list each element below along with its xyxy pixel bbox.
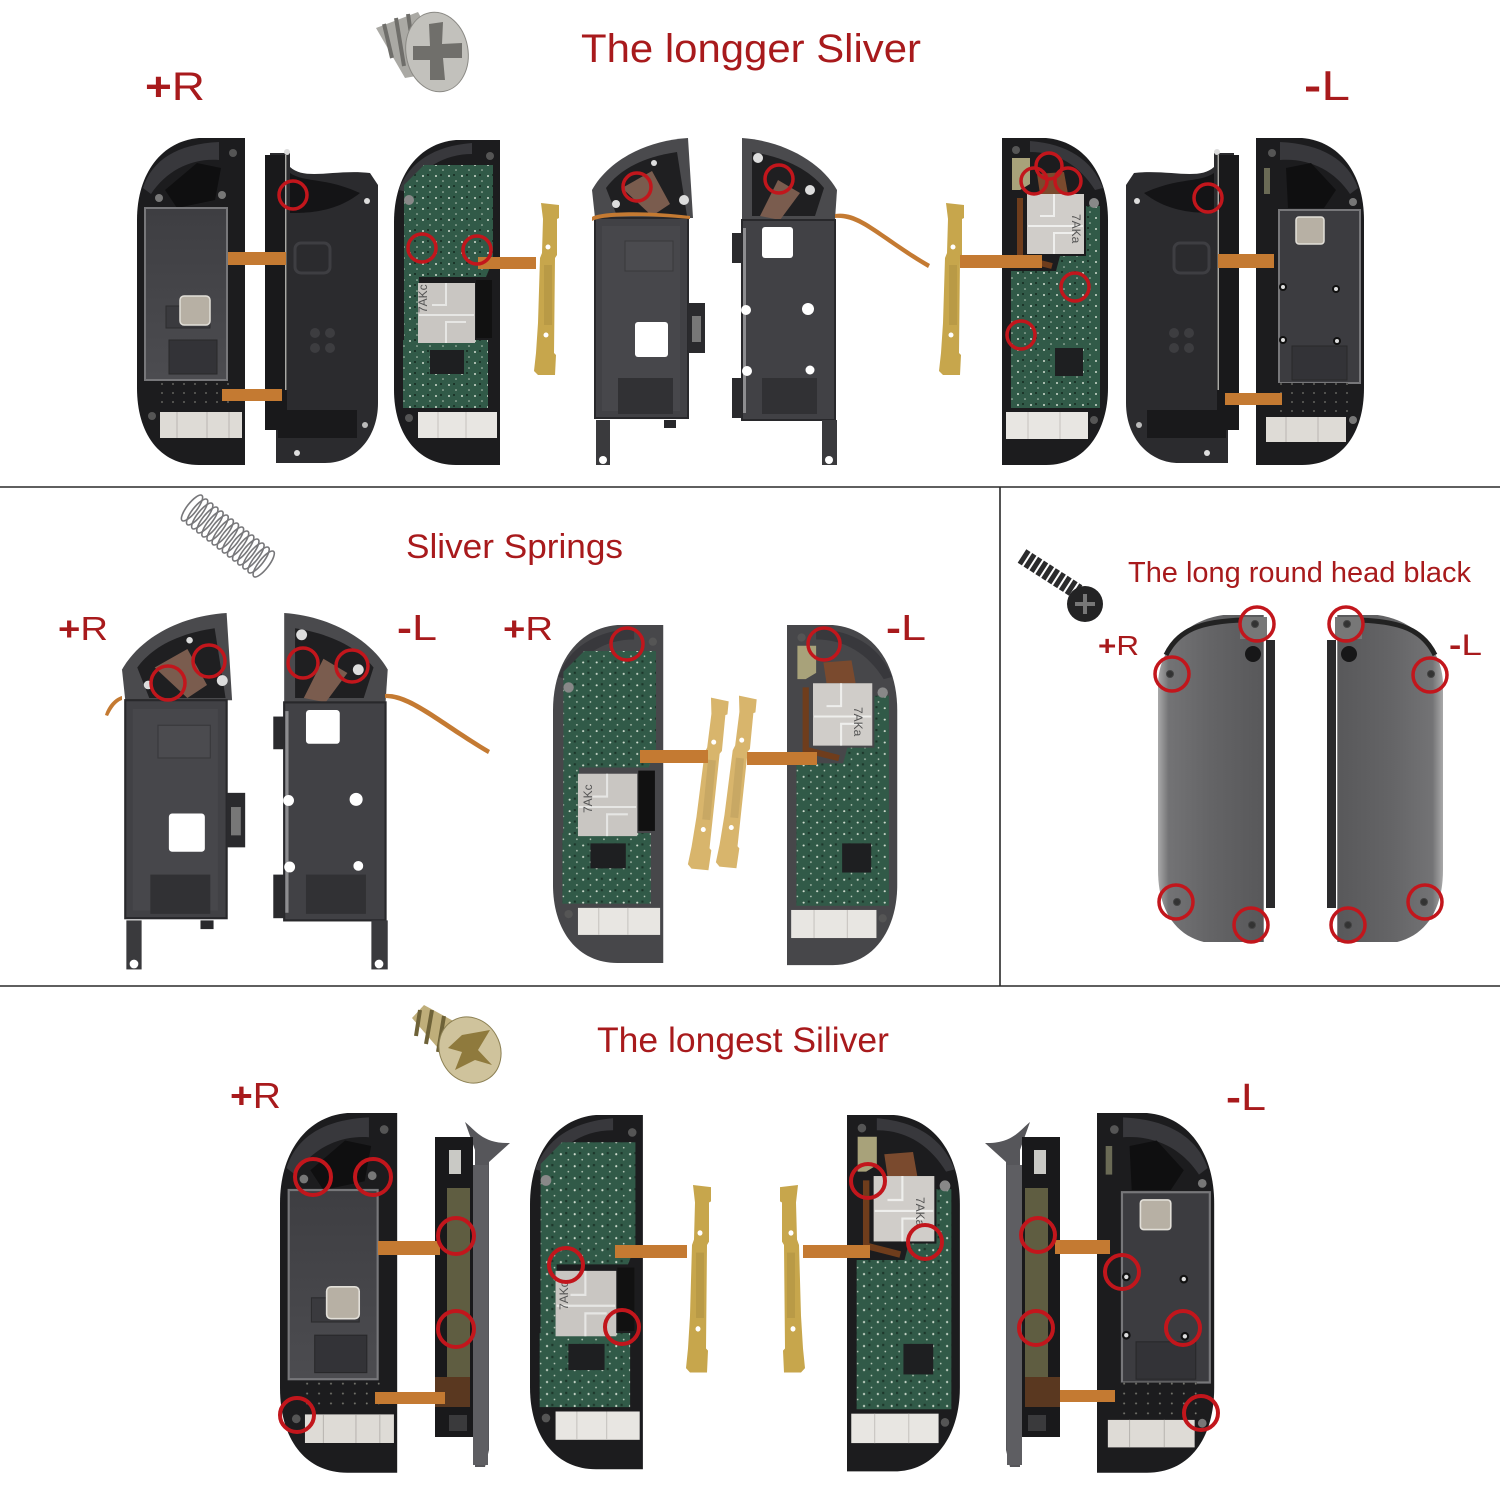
label: +R left: +R: [58, 610, 108, 647]
label: -L: -L: [1304, 62, 1350, 109]
gold strip right: [534, 203, 559, 375]
joy-con right casing: [280, 1113, 397, 1473]
red circles: [1155, 607, 1447, 942]
icon: black screw: [1022, 556, 1103, 622]
icon: gold screw: [412, 1005, 513, 1094]
mid frame left: [273, 613, 388, 969]
joy-con right circuit board: [553, 625, 663, 963]
label: +R: +R: [230, 1075, 281, 1116]
heading: Sliver Springs: Sliver Springs: [406, 528, 623, 566]
gold strip left: [780, 1185, 805, 1372]
joy-con right circuit board: [530, 1115, 643, 1469]
joy-con right circuit board: [394, 140, 500, 465]
joy-con right rear shell: [265, 149, 378, 463]
label: -L: -L: [1226, 1077, 1266, 1119]
joy-con left rear shell: [1126, 149, 1239, 463]
panel: the longer silver screws: [137, 7, 1364, 465]
mid frame right: [122, 613, 245, 969]
mid frame right: [592, 138, 705, 465]
label: -L: -L: [1449, 629, 1482, 662]
icon: spring: [178, 492, 277, 580]
joy-con left circuit board: [847, 1115, 960, 1471]
chip label right: 7AKc: [581, 784, 595, 813]
label: +R: +R: [145, 65, 205, 109]
chip label left: 7AKa: [1069, 214, 1083, 244]
mid frame left: [732, 138, 837, 465]
right rail side view: [435, 1122, 510, 1467]
left rail side view: [985, 1122, 1060, 1467]
panel: silver springs: [58, 492, 926, 969]
red markers: [280, 1159, 1218, 1432]
flex cables: [222, 212, 1282, 405]
label: +R: +R: [1098, 630, 1139, 661]
joy-con left casing: [1256, 138, 1364, 465]
gold strip right: [686, 1185, 711, 1372]
joy-con right casing: [137, 138, 245, 465]
red markers: [279, 153, 1222, 349]
heading: The longger Sliver: The longger Sliver: [581, 27, 921, 71]
gold strip left: [939, 203, 964, 375]
back shell right: [1158, 615, 1275, 942]
heading: The longest Siliver: The longest Siliver: [597, 1021, 889, 1060]
label: -L right: -L: [886, 607, 926, 648]
panel: the longest silver screws: [230, 1005, 1266, 1473]
chip label right: 7AKc: [557, 1281, 571, 1310]
joy-con left circuit board: [1002, 138, 1108, 465]
red markers: [151, 628, 840, 700]
chip label left: 7AKa: [913, 1197, 927, 1227]
back shell left: [1327, 615, 1443, 942]
label: -L left: -L: [397, 607, 437, 648]
panel: long round head black screws: [1022, 556, 1482, 942]
gold strip left: [716, 695, 757, 869]
heading: The long round head black: The long round head black: [1128, 557, 1471, 589]
flex cables: [105, 694, 817, 765]
joy-con left casing: [1097, 1113, 1214, 1473]
gold strip right: [688, 697, 729, 871]
flex cables: [375, 1240, 1115, 1404]
screw heads: [1166, 620, 1434, 928]
chip label left: 7AKa: [851, 707, 865, 737]
icon: silver screw: [376, 7, 474, 97]
joy-con left circuit board: [787, 625, 897, 965]
label: +R right: +R: [503, 610, 553, 647]
chip label right: 7AKc: [416, 284, 430, 313]
divider lines: [0, 487, 1500, 986]
